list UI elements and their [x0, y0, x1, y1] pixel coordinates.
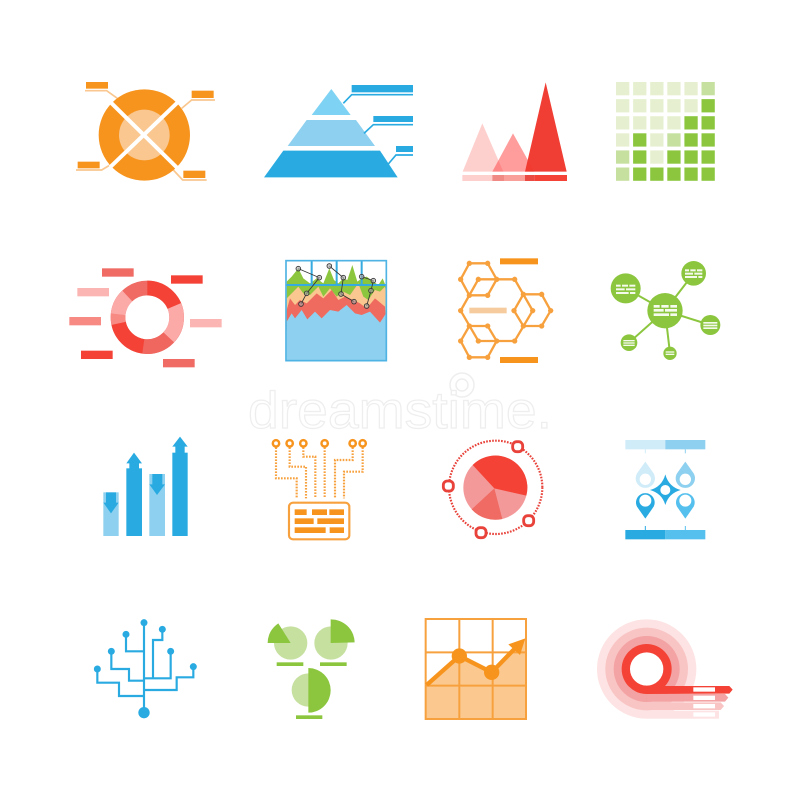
watermark: dreamstime. [248, 382, 552, 440]
icon: layered area chart with line markers [286, 261, 387, 361]
icon: red triangle peaks chart [462, 82, 567, 181]
icon: orange crossed donut with labels [76, 82, 215, 181]
icon: blue map pins between bars [625, 440, 705, 539]
icon: red pie chart with dotted orbit [443, 441, 542, 538]
icon: blue circuit tree [94, 619, 197, 718]
icon: orange hexagon network [458, 258, 553, 363]
icon: red concentric ring with ribbons [597, 619, 733, 719]
icon: dotted circuit lines into text box [273, 440, 366, 539]
icon: blue pyramid with labels [264, 85, 413, 177]
icon: red segmented donut with labels [69, 268, 222, 367]
icon: green bubble network [611, 261, 720, 360]
icon: bars with up and down arrows [103, 437, 188, 536]
icon: three green pie charts [268, 619, 355, 719]
icon: orange line chart with arrow [426, 619, 526, 719]
icon: green heat grid [616, 82, 715, 181]
